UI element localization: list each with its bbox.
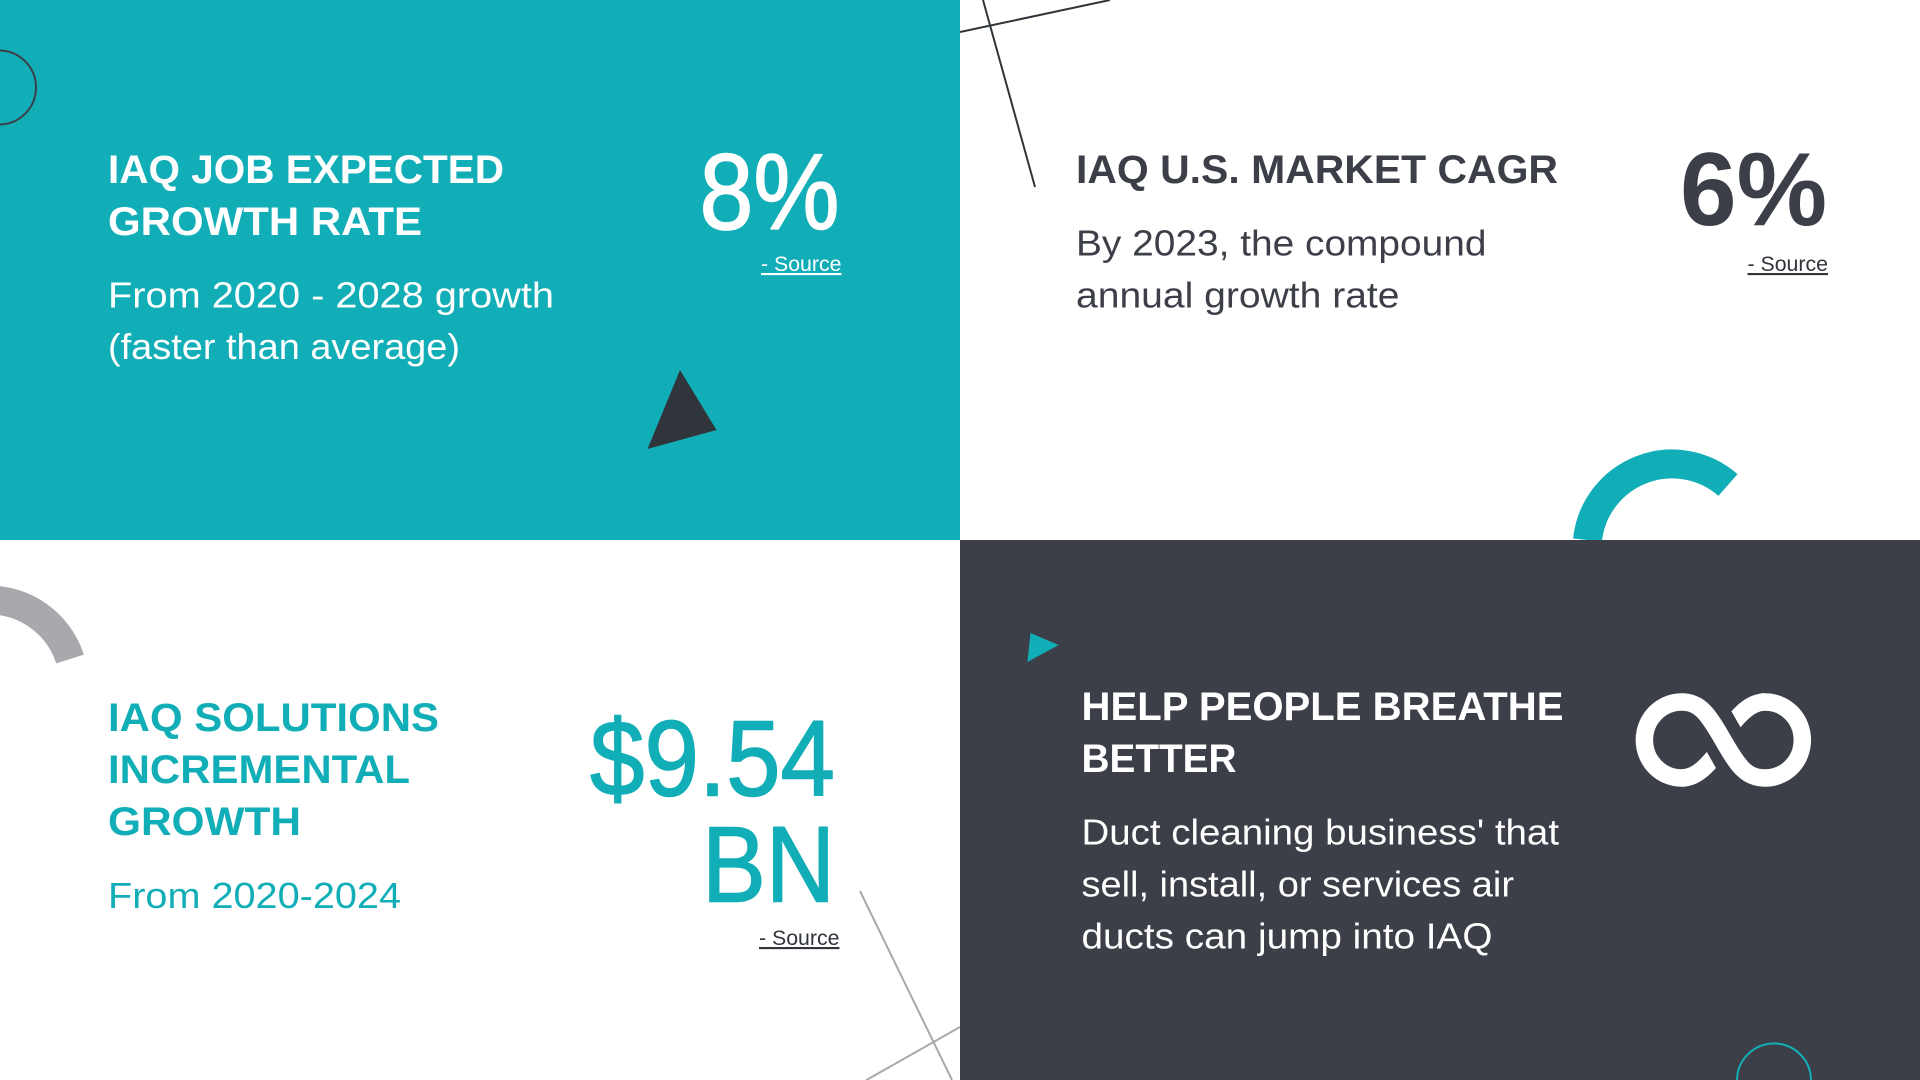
source link: - Source: [761, 252, 842, 276]
description: breathe better: [1082, 812, 1559, 957]
description: job growth: [108, 274, 554, 367]
decorative crossing lines: [860, 891, 960, 1080]
decorative teal arc: [1588, 464, 1728, 540]
heading: job growth: [108, 148, 504, 244]
description: market CAGR: [1076, 222, 1486, 316]
heading: breathe better: BETTER: [1082, 737, 1237, 781]
statistic: 6%: 6%: [1680, 132, 1827, 248]
panel: incremental growth: [0, 540, 960, 1080]
description: job growth: (faster than average): [108, 326, 460, 367]
source link: - Source: [1748, 252, 1828, 276]
panel: help people breathe better: [960, 540, 1920, 1080]
decorative grey arc: [0, 600, 70, 659]
heading: incremental growth: INCREMENTAL: [108, 748, 410, 792]
panel: market CAGR: [960, 0, 1920, 540]
description: market CAGR: By 2023, the compound: [1076, 222, 1486, 264]
heading: incremental growth: [108, 696, 439, 844]
statistic: $9.54 BN: $9.54: [590, 698, 835, 818]
heading: job growth: GROWTH RATE: [108, 200, 422, 244]
description: breathe better: Duct cleaning business' that: [1082, 812, 1559, 853]
heading: incremental growth: IAQ SOLUTIONS: [108, 696, 439, 740]
decorative circle outline: [0, 50, 36, 124]
heading: incremental growth: GROWTH: [108, 800, 301, 844]
decorative crossing lines: [960, 0, 1110, 187]
heading: breathe better: [1082, 685, 1564, 781]
description: incremental growth: From 2020-2024: [108, 875, 401, 916]
heading: breathe better: HELP PEOPLE BREATHE: [1082, 685, 1564, 729]
icon: teal triangle: [1027, 633, 1059, 662]
source link: - Source: [759, 926, 840, 950]
statistic: 8%: 8%: [700, 131, 840, 252]
panel: job growth rate: [0, 0, 960, 540]
decorative teal circle outline: [1737, 1044, 1811, 1080]
icon: dark triangle: [648, 370, 716, 449]
description: market CAGR: annual growth rate: [1076, 274, 1400, 316]
statistic: $9.54 BN: BN: [702, 804, 835, 924]
description: job growth: From 2020 - 2028 growth: [108, 274, 554, 316]
heading: job growth: IAQ JOB EXPECTED: [108, 148, 504, 192]
heading: market CAGR: IAQ U.S. MARKET CAGR: [1076, 148, 1558, 192]
icon: infinity symbol: [1644, 678, 1802, 794]
description: breathe better: ducts can jump into IAQ: [1082, 916, 1492, 957]
statistic: $9.54 BN: [590, 698, 835, 924]
description: breathe better: sell, install, or services air: [1082, 864, 1514, 905]
